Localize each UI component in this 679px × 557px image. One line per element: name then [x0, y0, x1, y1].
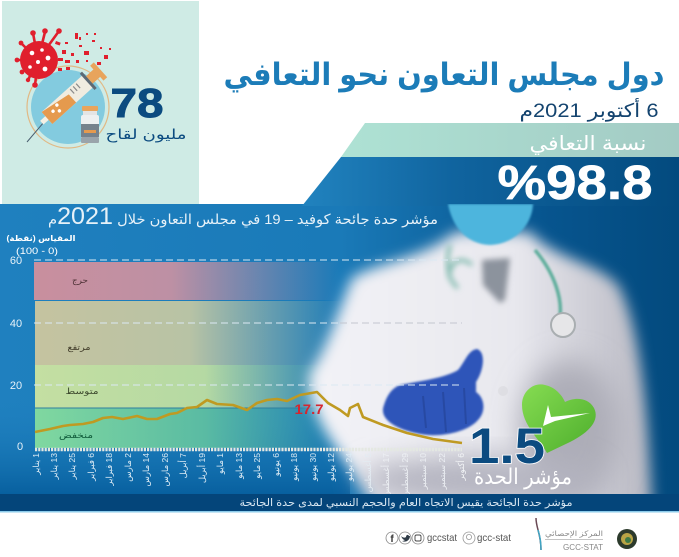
band labels: حرج	[72, 275, 88, 285]
panel: main blue background	[0, 204, 679, 494]
line: severity trend	[35, 392, 462, 443]
value label: 17.7: 17.7	[294, 401, 324, 417]
x axis date labels: 18 يونيو	[289, 453, 299, 482]
chart heading: مؤشر حدة جائحة كوفيد – 19 في مجلس التعاون خلال 2021م	[48, 203, 438, 230]
label: million doses: مليون لقاح	[106, 126, 186, 143]
chart: severity bands	[34, 262, 345, 448]
value: severity index 1.5: 1.5	[469, 418, 545, 474]
band labels: منخفض	[59, 430, 93, 440]
x axis date labels: 29 أغسطس	[399, 453, 410, 497]
icon: virus dispersing	[15, 28, 111, 88]
y axis labels: 0	[17, 441, 23, 453]
date: 6 أكتوبر 2021م	[520, 98, 658, 122]
icon: green heart	[522, 384, 596, 453]
footer: social handles: gccstat	[427, 532, 457, 544]
chart: severity index	[6, 234, 466, 497]
x axis date labels: 6 أكتوبر	[455, 453, 466, 482]
x axis date labels: 13 مايو	[234, 453, 244, 480]
x axis date labels: 12 يوليو	[326, 453, 336, 482]
x axis date labels: 17 أغسطس	[380, 453, 391, 497]
band labels	[59, 275, 98, 440]
label: severity index: مؤشر الحدة	[474, 464, 572, 489]
footer: social handles	[386, 532, 511, 545]
x axis date labels: 18 فبراير	[104, 453, 114, 487]
x axis date labels: 13 يناير	[49, 453, 59, 480]
footer: GCC-STAT logo: GCC-STAT	[563, 543, 603, 552]
band labels: متوسط	[66, 386, 98, 396]
x axis date labels: 19 أبريل	[196, 453, 207, 483]
x axis date labels: 1 يناير	[31, 453, 41, 476]
x axis date labels: 10 سبتمبر	[418, 453, 428, 490]
y axis title: (100 - 0)	[16, 246, 58, 256]
x axis date labels: 24 يوليو	[344, 453, 354, 482]
y axis labels: 40	[10, 318, 22, 330]
footer: GCC-STAT logo	[536, 518, 603, 552]
footnote bar	[0, 494, 679, 512]
x axis date labels: 30 يونيو	[308, 453, 318, 482]
x axis date labels: 25 مايو	[252, 453, 262, 480]
y axis labels: 20	[10, 380, 22, 392]
icon: syringe and vial	[27, 62, 109, 148]
y axis labels: 60	[10, 255, 22, 267]
panel: recovery percentage band	[302, 157, 679, 210]
x axis strip	[35, 448, 462, 451]
x axis date labels	[31, 453, 466, 497]
y axis title: المقياس (نقطة)	[6, 234, 76, 244]
x axis date labels: 6 يونيو	[271, 453, 281, 477]
band labels: مرتفع	[68, 342, 90, 352]
footnote: مؤشر حدة الجائحة يقيس الاتجاه العام والحجم النسبي لمدى حدة الجائحة	[240, 497, 572, 509]
footer: social handles: f	[390, 534, 394, 545]
number: 78: 78	[110, 80, 164, 126]
label: recovery rate: نسبة التعافي	[530, 133, 646, 156]
x axis date labels: 14 مارس	[141, 453, 151, 486]
x axis date labels: 25 يناير	[67, 453, 77, 480]
x axis date labels: 7 أبريل	[177, 453, 188, 478]
panel: recovery rate band	[341, 123, 679, 157]
x axis date labels: 6 فبراير	[86, 453, 96, 482]
footer: GCC emblem	[617, 529, 637, 549]
x axis date labels: 2 مارس	[123, 453, 133, 482]
number: 98.8 percent: %98.8	[498, 157, 652, 210]
y axis title	[6, 234, 76, 256]
icon: gloved hand	[383, 349, 483, 435]
panel: vaccine	[2, 1, 199, 204]
check mark	[543, 405, 590, 426]
footer: social handles: gcc-stat	[477, 532, 511, 544]
x axis date labels: 1 مايو	[215, 453, 225, 475]
footer: GCC-STAT logo: المركز الإحصائي	[545, 529, 603, 538]
x axis date labels: 22 سبتمبر	[437, 453, 447, 490]
y axis labels	[10, 255, 23, 453]
x axis date labels: 26 مارس	[160, 453, 170, 486]
illustration: doctor	[309, 204, 652, 510]
x axis date labels: 5 أغسطس	[362, 453, 373, 492]
